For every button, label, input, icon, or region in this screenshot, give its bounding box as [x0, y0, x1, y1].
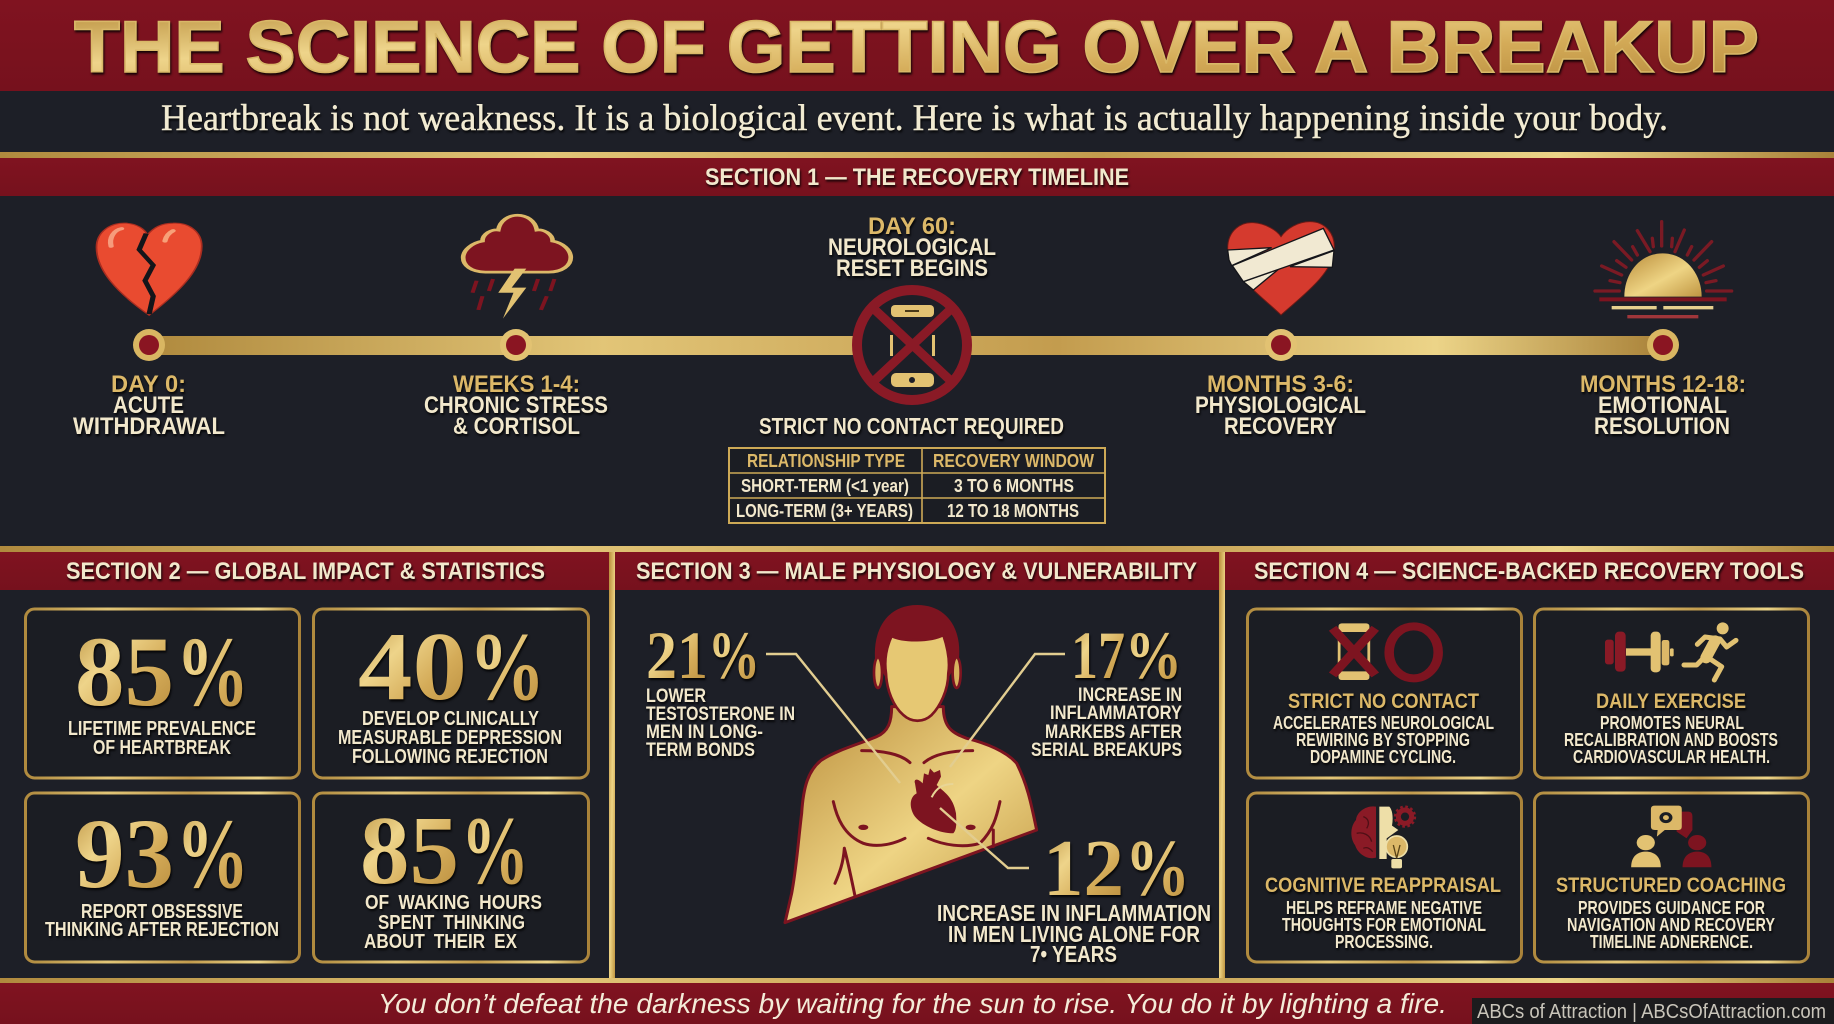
timeline label: weeks 1-4: [424, 371, 608, 440]
panel: section 4 recovery tools: [1225, 552, 1834, 962]
callout: 21% testosterone: TESTOSTERONE IN: [646, 704, 795, 725]
icon: anatomical heart: [911, 768, 956, 833]
tool card: daily exercise: [1534, 609, 1808, 778]
section 2 header: SECTION 2 — GLOBAL IMPACT & STATISTICS: [66, 558, 545, 585]
panel: section 3 male physiology: [615, 552, 1219, 967]
icon: phone X and O: [1333, 623, 1438, 680]
title: THE SCIENCE OF GETTING OVER A BREAKUP: [74, 7, 1759, 88]
callout: 21% testosterone: 21: [646, 617, 708, 693]
stat card: 40% depression: DEVELOP CLINICALLY: [362, 708, 540, 730]
tool card: structured coaching: [1534, 793, 1808, 962]
tool card: cognitive reappraisal: HELPS REFRAME NEGATIVE: [1286, 898, 1482, 918]
footer band: [0, 983, 1834, 1024]
section 4 header: [1225, 552, 1834, 590]
tool card: daily exercise: CARDIOVASCULAR HEALTH.: [1573, 747, 1770, 767]
stat card: 85% waking hours: ABOUT THEIR EX: [364, 931, 518, 953]
callout: 17% inflammatory markers: INFLAMMATORY: [1050, 703, 1182, 724]
timeline label: day 0: DAY 0:: [111, 371, 186, 398]
tool card: strict no contact: ACCELERATES NEUROLOGICAL: [1273, 713, 1494, 733]
stat card: 85% waking hours: SPENT THINKING: [378, 912, 525, 934]
section 3 header: SECTION 3 — MALE PHYSIOLOGY & VULNERABILITY: [636, 558, 1197, 585]
stat card: 40% depression: %: [469, 613, 545, 721]
recovery window table: RELATIONSHIP TYPE: [747, 451, 905, 471]
tool card: strict no contact: STRICT NO CONTACT: [1288, 690, 1479, 713]
stat card: 85% waking hours: OF WAKING HOURS: [365, 892, 542, 914]
tool card: cognitive reappraisal: PROCESSING.: [1335, 932, 1433, 952]
panel: section 2 global impact: [0, 552, 609, 962]
recovery window table: 12 TO 18 MONTHS: [947, 501, 1079, 521]
stat card: 85% waking hours: [314, 793, 588, 962]
callout: 12% inflammation living alone: IN MEN LIVING ALONE FOR: [948, 921, 1200, 947]
callout: 17% inflammatory markers: [1031, 617, 1182, 761]
stat card: 85% lifetime prevalence: [26, 609, 300, 778]
icon: rising sun: [1595, 222, 1732, 317]
leader line: 17%: [950, 654, 1065, 767]
icon: coach and client: [1631, 806, 1711, 867]
callout: 12% inflammation living alone: %: [1125, 825, 1190, 913]
timeline label: day 0: [73, 371, 225, 440]
no contact caption: STRICT NO CONTACT REQUIRED: [759, 413, 1064, 439]
icon: dumbbell and runner: [1605, 622, 1736, 680]
section 3 header: [615, 552, 1219, 590]
timeline label: weeks 1-4: & CORTISOL: [453, 413, 580, 440]
timeline label: months 3-6: PHYSIOLOGICAL: [1195, 392, 1366, 419]
timeline label: day 0: ACUTE: [113, 392, 184, 419]
recovery window table: SHORT-TERM (<1 year): [741, 476, 909, 496]
callout: 17% inflammatory markers: MARKEBS AFTER: [1045, 722, 1182, 743]
recovery window table: 3 TO 6 MONTHS: [954, 476, 1074, 496]
callout: 17% inflammatory markers: SERIAL BREAKUPS: [1031, 740, 1182, 761]
callout: 21% testosterone: [646, 617, 795, 761]
timeline label: months 12-18: EMOTIONAL: [1598, 392, 1727, 419]
timeline bar: [149, 336, 1663, 355]
timeline label: weeks 1-4: CHRONIC STRESS: [424, 392, 608, 419]
tool card: structured coaching: TIMELINE ADNERENCE.: [1590, 932, 1753, 952]
stat card: 93% obsessive thinking: THINKING AFTER REJECTION: [45, 919, 279, 941]
callout: 12% inflammation living alone: 12: [1043, 825, 1124, 913]
recovery window table: LONG-TERM (3+ YEARS): [736, 501, 913, 521]
section 2 header: [0, 552, 609, 590]
callout: 17% inflammatory markers: 17: [1071, 617, 1125, 693]
section 1 header: SECTION 1 — THE RECOVERY TIMELINE: [705, 164, 1129, 191]
title banner: [0, 0, 1834, 91]
tool card: cognitive reappraisal: COGNITIVE REAPPRAISAL: [1265, 874, 1501, 897]
callout: 21% testosterone: LOWER: [646, 686, 706, 707]
icon: broken heart: [96, 223, 202, 315]
icon: bandaged heart: [1228, 222, 1334, 315]
stat card: 85% lifetime prevalence: LIFETIME PREVALENCE: [68, 718, 256, 740]
tool card: structured coaching: PROVIDES GUIDANCE FOR: [1578, 898, 1765, 918]
stat card: 93% obsessive thinking: 93: [75, 798, 174, 909]
tool card: cognitive reappraisal: [1248, 793, 1522, 962]
stat card: 40% depression: FOLLOWING REJECTION: [352, 746, 548, 768]
callout: 21% testosterone: MEN IN LONG-: [646, 722, 763, 743]
stat card: 85% lifetime prevalence: %: [176, 616, 249, 727]
panel: recovery timeline: [73, 213, 1746, 523]
timeline label: day 60: DAY 60:: [868, 213, 956, 240]
stat card: 93% obsessive thinking: %: [176, 798, 249, 909]
tool card: cognitive reappraisal: THOUGHTS FOR EMOTIONAL: [1282, 915, 1486, 935]
subtitle: Heartbreak is not weakness. It is a biological event. Here is what is actually happening inside your body.: [161, 98, 1668, 139]
tool card: strict no contact: [1248, 609, 1522, 778]
tool card: structured coaching: STRUCTURED COACHING: [1556, 874, 1786, 897]
callout: 17% inflammatory markers: %: [1125, 617, 1182, 693]
stat card: 85% lifetime prevalence: 85: [75, 616, 174, 727]
timeline label: weeks 1-4: WEEKS 1-4:: [453, 371, 580, 398]
leader line: 12%: [940, 808, 1029, 868]
male torso figure: [785, 605, 1037, 923]
timeline label: day 60: [828, 213, 996, 282]
timeline label: day 60: NEUROLOGICAL: [828, 234, 996, 261]
stat card: 40% depression: MEASURABLE DEPRESSION: [338, 727, 562, 749]
recovery window table: [729, 448, 1105, 523]
tool card: daily exercise: RECALIBRATION AND BOOSTS: [1564, 730, 1778, 750]
stat card: 85% waking hours: 85: [360, 797, 459, 905]
timeline label: day 60: RESET BEGINS: [836, 255, 988, 282]
timeline node: day 0: [133, 329, 165, 361]
stat card: 85% lifetime prevalence: OF HEARTBREAK: [93, 737, 231, 759]
callout: 12% inflammation living alone: [937, 825, 1211, 967]
stat card: 40% depression: [314, 609, 588, 778]
tool card: structured coaching: NAVIGATION AND RECOVERY: [1567, 915, 1775, 935]
icon: brain, gear and bulb: [1351, 806, 1415, 868]
callout: 21% testosterone: %: [708, 617, 760, 693]
tool card: strict no contact: DOPAMINE CYCLING.: [1310, 747, 1456, 767]
timeline label: months 12-18: [1580, 371, 1746, 440]
footer quote: You don’t defeat the darkness by waiting for the sun to rise. You do it by lighting a fire.: [378, 988, 1447, 1019]
timeline label: day 0: WITHDRAWAL: [73, 413, 225, 440]
callout: 12% inflammation living alone: INCREASE IN INFLAMMATION: [937, 900, 1211, 926]
timeline node: months 3-6: [1265, 329, 1297, 361]
leader line: 21%: [766, 654, 900, 783]
tool card: strict no contact: REWIRING BY STOPPING: [1296, 730, 1470, 750]
stat card: 85% waking hours: %: [461, 797, 529, 905]
callout: 12% inflammation living alone: 7• YEARS: [1030, 941, 1117, 967]
icon: no phone symbol: [857, 290, 967, 400]
timeline label: months 3-6: MONTHS 3-6:: [1207, 371, 1354, 398]
stat card: 93% obsessive thinking: [26, 793, 300, 962]
recovery window table: RECOVERY WINDOW: [933, 451, 1094, 471]
timeline label: months 3-6: [1195, 371, 1366, 440]
timeline label: months 12-18: RESOLUTION: [1594, 413, 1730, 440]
section 1 header: [0, 158, 1834, 196]
tool card: daily exercise: PROMOTES NEURAL: [1600, 713, 1744, 733]
timeline node: months 12-18: [1647, 329, 1679, 361]
timeline label: months 12-18: MONTHS 12-18:: [1580, 371, 1746, 398]
icon: storm cloud: [463, 215, 571, 319]
callout: 17% inflammatory markers: INCREASE IN: [1078, 685, 1182, 706]
stat card: 93% obsessive thinking: REPORT OBSESSIVE: [81, 901, 243, 923]
tool card: daily exercise: DAILY EXERCISE: [1596, 690, 1746, 713]
timeline label: months 3-6: RECOVERY: [1224, 413, 1337, 440]
timeline node: weeks 1-4: [500, 329, 532, 361]
stat card: 40% depression: 40: [358, 613, 467, 721]
callout: 21% testosterone: TERM BONDS: [646, 740, 755, 761]
